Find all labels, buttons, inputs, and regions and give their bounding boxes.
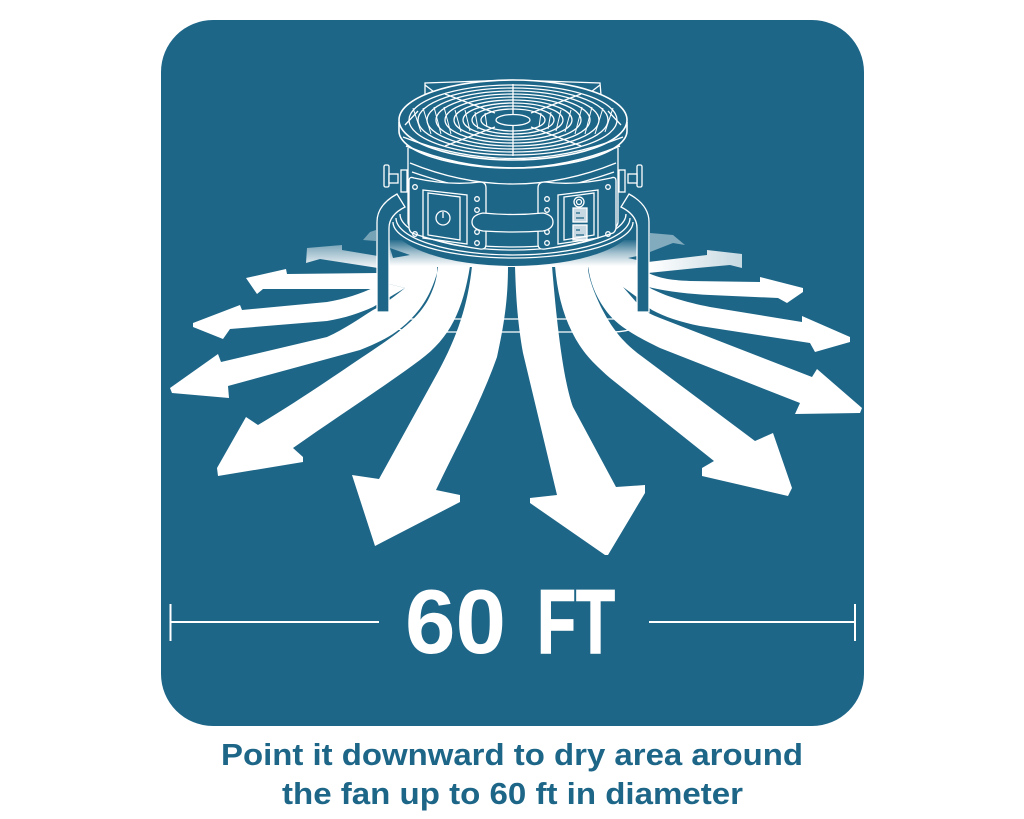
left control panel xyxy=(409,177,486,249)
caption line 1: Point it downward to dry area around xyxy=(221,737,803,772)
arrow: right long xyxy=(588,266,862,414)
mounting bracket xyxy=(425,80,601,95)
dimension line: right xyxy=(649,604,855,641)
dimension line: left xyxy=(170,604,379,641)
arrow: lower right xyxy=(555,266,792,496)
caption xyxy=(221,737,803,811)
hub xyxy=(496,114,530,126)
arrow: right faded small xyxy=(650,233,685,252)
grill cross pattern xyxy=(413,107,613,134)
base ring xyxy=(391,178,635,266)
airflow arrows xyxy=(170,230,862,555)
right control panel xyxy=(538,177,616,249)
arrow: bottom left xyxy=(352,266,508,546)
arrow: right faded xyxy=(648,250,742,273)
glow under fan xyxy=(389,240,637,267)
right stand leg and knob xyxy=(619,165,649,312)
arrow: right medium xyxy=(645,285,850,352)
arrow: left faded small xyxy=(363,230,376,241)
panel: blue background xyxy=(161,20,864,726)
floor ring lines xyxy=(385,319,642,332)
grill spokes xyxy=(405,84,621,156)
body xyxy=(408,148,618,247)
body contour lines xyxy=(410,163,616,187)
left stand leg and knob xyxy=(377,165,407,312)
fan illustration xyxy=(377,80,649,312)
arrow: lower left xyxy=(217,266,470,476)
heading: 60 FT: FT xyxy=(537,572,615,673)
arrow: left faded xyxy=(306,245,378,268)
shadow slivers in glow xyxy=(390,248,637,260)
heading: 60 FT xyxy=(405,572,615,673)
handle xyxy=(472,213,553,232)
caption line 2: the fan up to 60 ft in diameter xyxy=(282,776,743,811)
arrow: right short xyxy=(648,273,803,303)
arrow: left long xyxy=(170,266,437,398)
arrow: left medium xyxy=(193,284,405,339)
top rim xyxy=(399,80,627,168)
arrow: left short xyxy=(246,269,378,294)
heading: 60 FT: 60 xyxy=(405,572,506,673)
arrow: bottom right xyxy=(515,266,645,555)
grill rings xyxy=(409,85,617,155)
